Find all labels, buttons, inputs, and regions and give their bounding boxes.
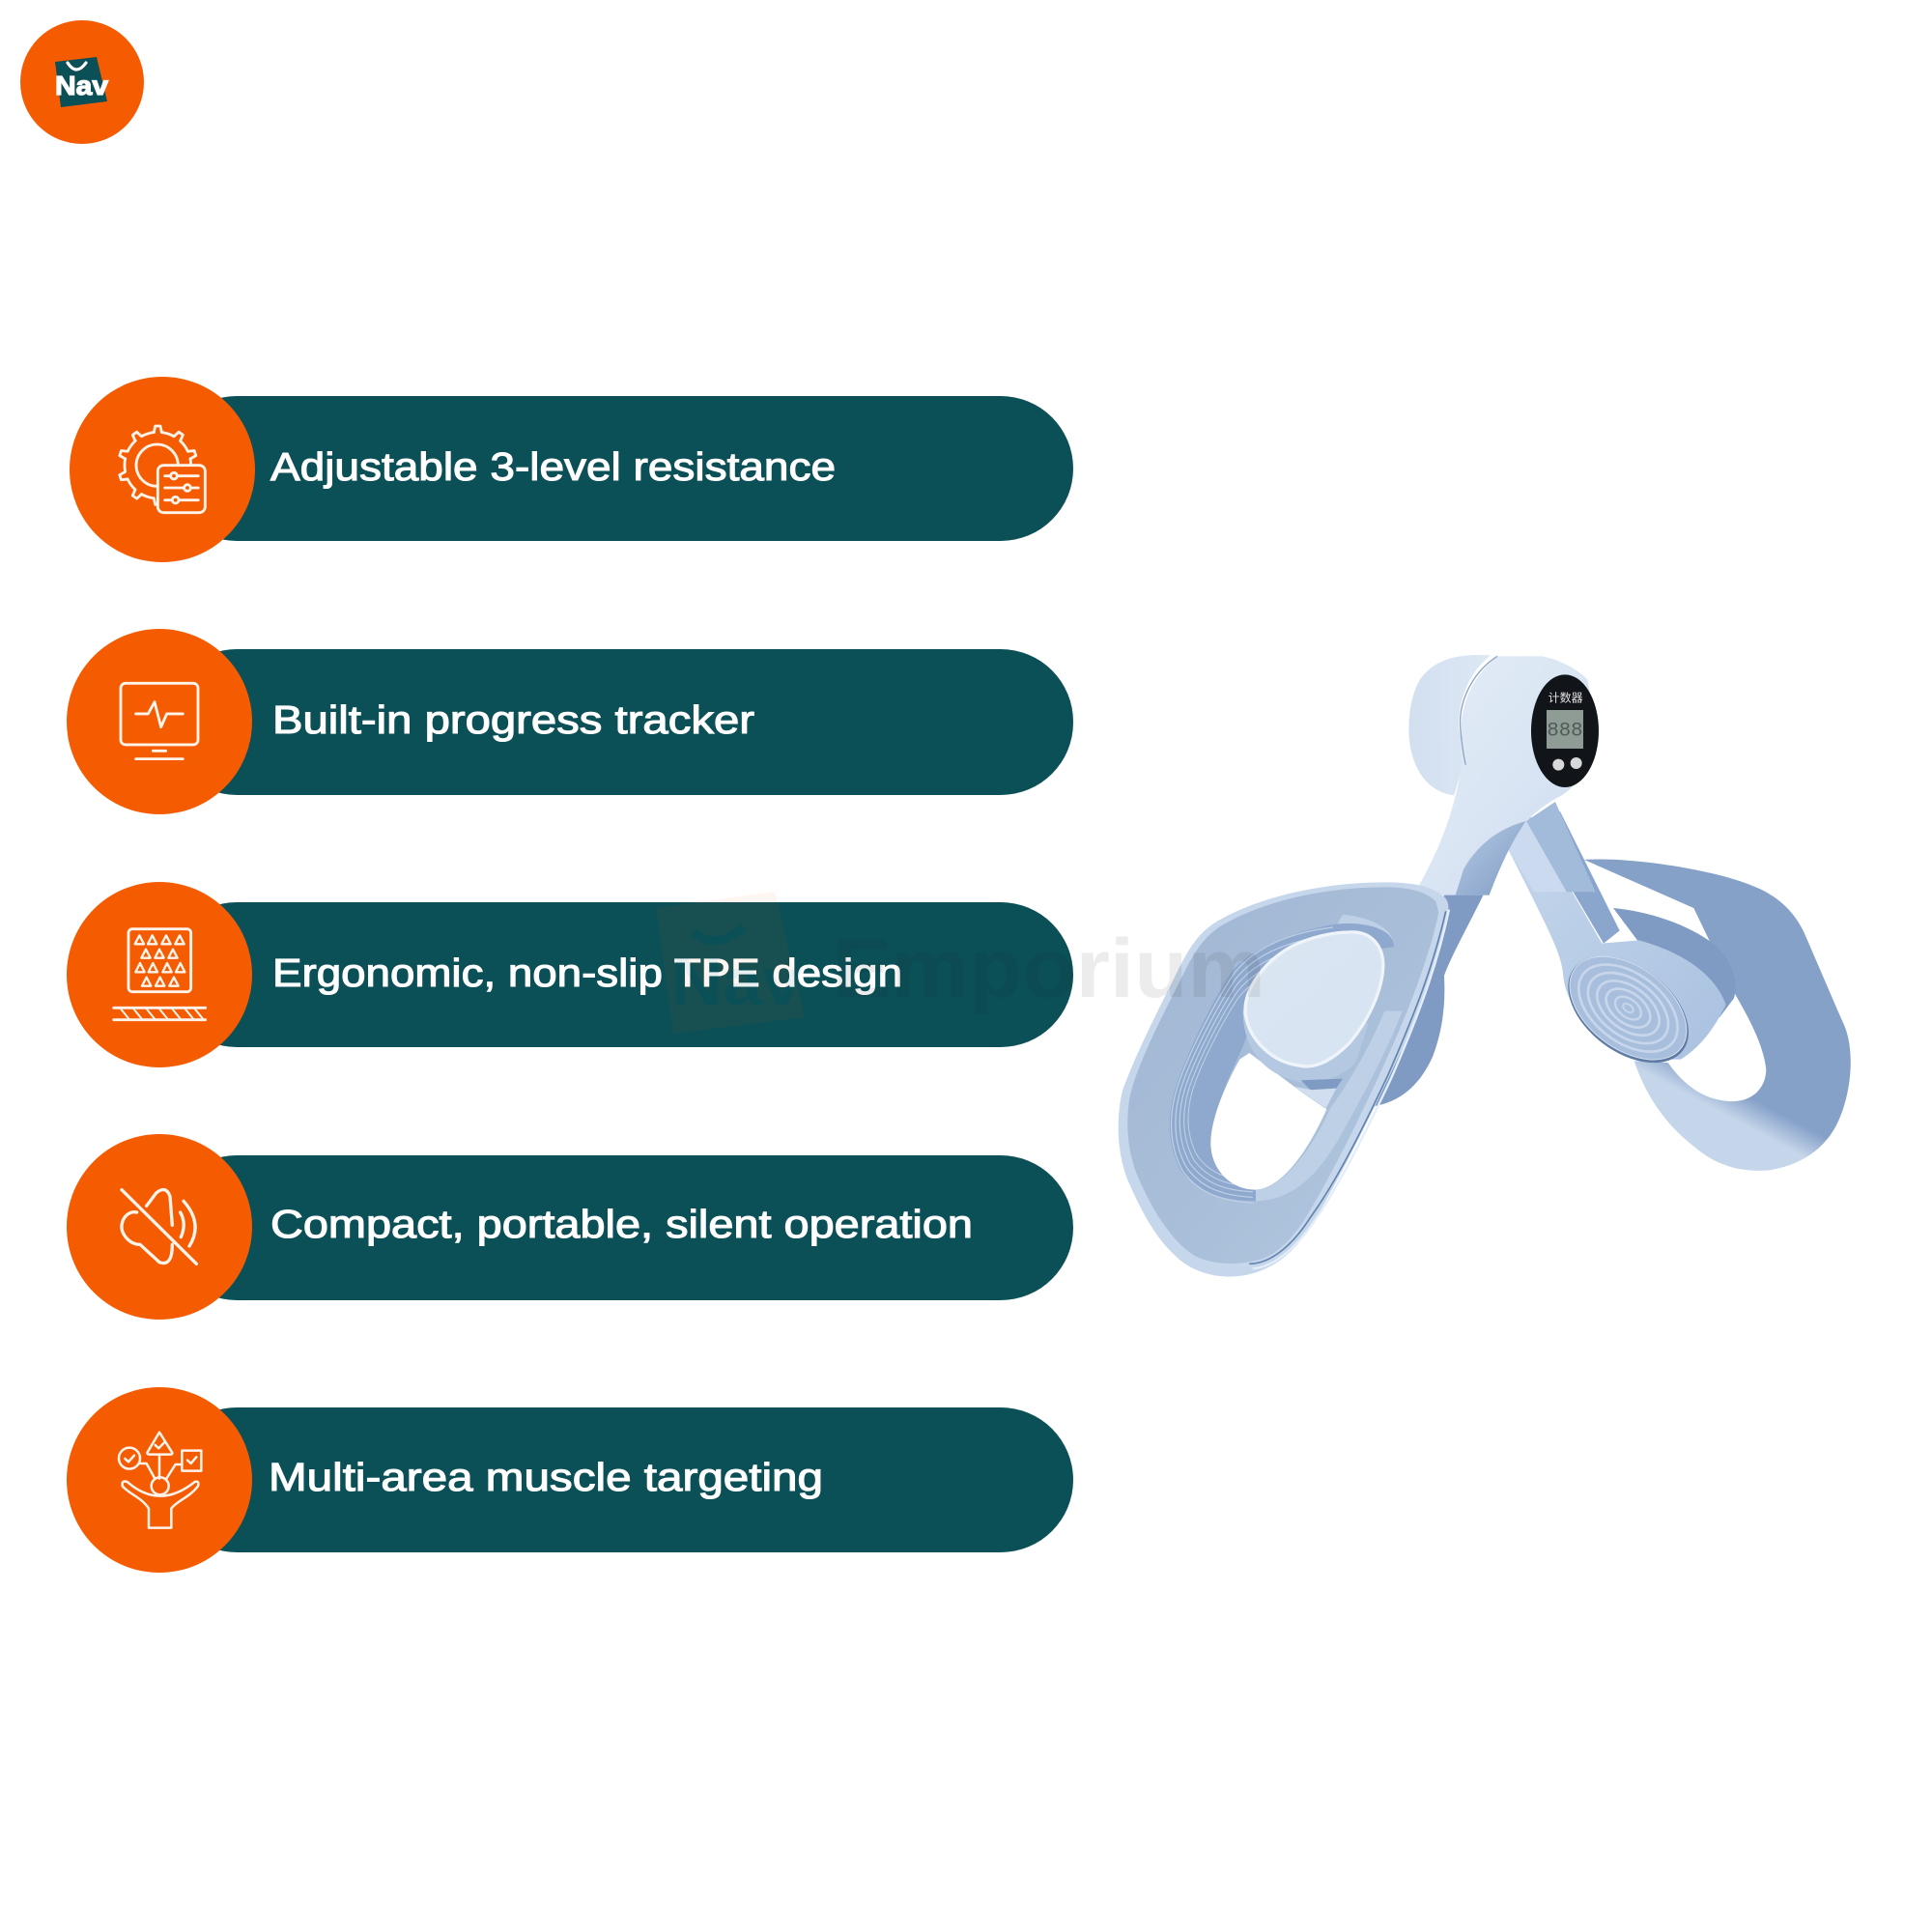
icon: person with target areas — [119, 1433, 201, 1528]
panel: feature 5 — [67, 1387, 1073, 1573]
watermark — [656, 892, 1265, 1034]
product photo: thigh trainer — [1119, 655, 1851, 1277]
label: compact operation: Compact, portable, silent operation — [270, 1202, 973, 1246]
logo badge — [20, 20, 144, 144]
rear cup and dark arm side — [1375, 869, 1495, 1106]
icon: muted speaker — [122, 1190, 196, 1264]
label: adjustable resistance: Adjustable 3-level resistance — [270, 444, 836, 489]
left leg pad — [1119, 882, 1449, 1277]
panel: feature 1 — [70, 377, 1073, 562]
panel: feature 3 — [67, 882, 1073, 1067]
white hole — [1210, 1053, 1326, 1190]
counter display: 888 — [1547, 721, 1583, 743]
pad upper highlight — [1336, 915, 1394, 947]
label: progress tracker: Built-in progress tracker — [272, 697, 754, 742]
right leg pad and arm — [1507, 811, 1851, 1171]
label: muscle targeting: Multi-area muscle targeting — [269, 1455, 823, 1499]
ribbed thumb pad — [1548, 934, 1709, 1085]
icon: gear with sliders — [119, 426, 205, 513]
right strut over disc — [1256, 1011, 1403, 1201]
counter display — [1531, 674, 1599, 787]
pad rim lines — [1249, 911, 1446, 1264]
label: ergonomic design: Ergonomic, non-slip TPE design — [272, 951, 902, 995]
logo badge: Nav — [55, 71, 108, 100]
icon: textured grip pad — [114, 929, 206, 1020]
watermark: Emporium — [833, 923, 1265, 1015]
left disc — [1245, 932, 1383, 1066]
watermark: Nav — [671, 944, 802, 1019]
panel: feature 2 — [67, 629, 1073, 814]
icon: monitor with pulse — [121, 683, 198, 759]
pad ridges — [1170, 923, 1394, 1201]
hub and upper arms — [1408, 655, 1599, 895]
panel: feature 4 — [67, 1134, 1073, 1320]
left disc side wall — [1243, 966, 1369, 1083]
counter display: 计数器 — [1548, 691, 1583, 705]
